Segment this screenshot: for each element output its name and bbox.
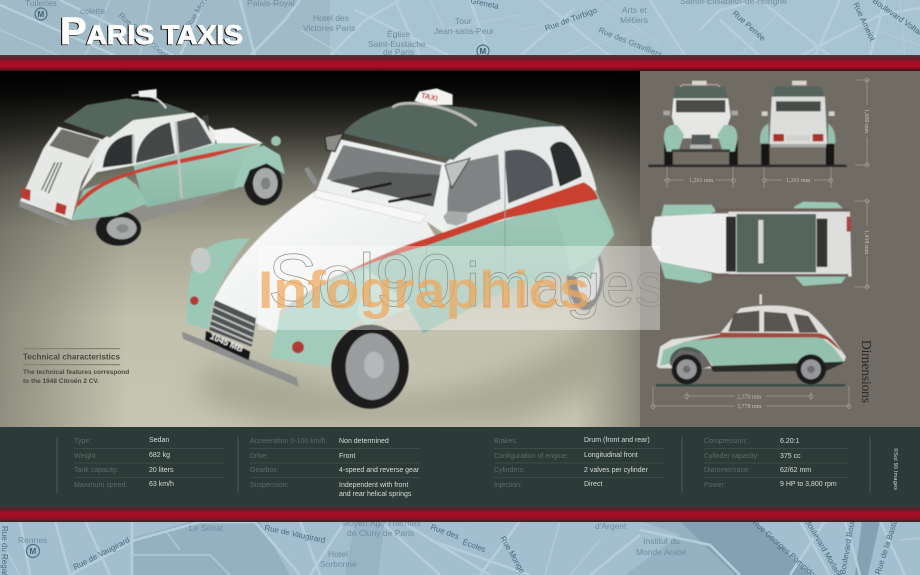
watermark bbox=[258, 239, 666, 330]
dimension labels: 2,370 mm bbox=[737, 394, 762, 400]
specs column 3: Direct bbox=[584, 481, 602, 488]
heading: dimensions: Dimensions bbox=[859, 340, 874, 403]
roof rail bbox=[393, 103, 477, 126]
wheel: rear big bbox=[567, 240, 603, 310]
title: PARIS TAXIS bbox=[60, 11, 243, 53]
wheel: front bbox=[244, 161, 282, 205]
watermark: Sol90 bbox=[268, 239, 457, 322]
dimension labels: 1,418 mm bbox=[863, 230, 869, 255]
map labels: top: Jean-sans-Peur bbox=[434, 26, 494, 36]
description: to the 1948 Citroën 2 CV. bbox=[23, 378, 99, 385]
dimension labels: 1,600 mm bbox=[863, 109, 869, 134]
dimension labels: 3,778 mm bbox=[737, 404, 762, 410]
number plate bbox=[205, 331, 250, 360]
map labels: bottom: Monde Arabe bbox=[636, 547, 687, 557]
specs column 3: Configuration of engine: bbox=[494, 453, 568, 460]
taxi roof sign bbox=[414, 88, 453, 105]
specs column 4: 6.20:1 bbox=[780, 438, 800, 445]
icon: metro stations top bbox=[35, 8, 489, 57]
icon: metro stations top: M bbox=[480, 47, 486, 56]
specs column 4: Diameter/race: bbox=[704, 467, 750, 474]
blueprint: side view bbox=[656, 294, 847, 386]
map labels: top: Église bbox=[387, 29, 410, 39]
map labels: top: Hotel des bbox=[313, 13, 349, 23]
map labels: top: Tour bbox=[455, 16, 472, 26]
fender: front right bbox=[270, 268, 411, 367]
roof bbox=[343, 103, 567, 160]
icon: metro stations top: M bbox=[38, 10, 44, 19]
text block: technical characteristics bbox=[23, 348, 129, 385]
dimension lines bbox=[651, 78, 870, 408]
map background: bottom bbox=[0, 506, 920, 575]
map labels: top: Rue Ameiot bbox=[851, 1, 877, 43]
grille bbox=[209, 300, 256, 347]
watermark: images bbox=[466, 251, 666, 320]
wheel: rear bbox=[96, 211, 141, 246]
specs column 2: Independent with front bbox=[339, 482, 408, 489]
map labels: bottom: de Cluny de Paris bbox=[347, 528, 414, 538]
fender: front left bbox=[187, 238, 250, 329]
specs column 4: Power: bbox=[704, 482, 726, 489]
red band: top bbox=[0, 55, 920, 71]
map labels: bottom: Écoles bbox=[461, 537, 487, 554]
map labels: bottom: Moyen Âge Thermes bbox=[342, 518, 421, 528]
specs column 1: Sedan bbox=[149, 437, 169, 444]
dimension labels bbox=[689, 109, 869, 410]
map labels: bottom: Rue Monge bbox=[498, 534, 527, 575]
specs column 2: Acceleration 0-100 km/h: bbox=[250, 438, 327, 445]
icon: metro station bottom: M bbox=[30, 547, 36, 556]
blueprint: top view bbox=[652, 202, 852, 286]
icon: metro station bottom bbox=[26, 544, 40, 558]
map labels: top: de Paris bbox=[383, 47, 414, 57]
map labels: bottom: Boulevard Bourdon bbox=[838, 506, 859, 575]
map labels: top bbox=[25, 0, 920, 61]
specs column 2: Suspension: bbox=[250, 482, 289, 489]
blueprint: front and rear views bbox=[648, 81, 847, 167]
map labels: bottom: Rue de la Bastille bbox=[873, 513, 901, 575]
car: main front three-quarter view taxi bbox=[182, 88, 614, 409]
specs column 4: Compression: bbox=[704, 438, 747, 445]
specs column 3: Drum (front and rear) bbox=[584, 437, 650, 444]
map labels: bottom: Rue de Vaugirard bbox=[72, 536, 131, 572]
title: PARIS TAXIS bbox=[59, 12, 242, 54]
map labels: top: Rue des Gravilliers bbox=[597, 26, 663, 59]
specs column 4: 62/62 mm bbox=[780, 467, 811, 474]
number plate: 1045 MB bbox=[209, 331, 245, 354]
map labels: top: Rue Perrée bbox=[731, 9, 767, 43]
headlight and lamps bbox=[190, 248, 304, 353]
body: mint lower side bbox=[337, 188, 614, 333]
dimension labels: 1,261 mm bbox=[786, 178, 811, 184]
panel: dimension drawings bbox=[648, 78, 874, 410]
wing mirror bbox=[443, 211, 468, 226]
map labels: top: Métiers bbox=[620, 15, 648, 25]
map labels: top: Rue de Turbigo bbox=[544, 6, 599, 33]
map labels: bottom: Rennes bbox=[18, 535, 47, 545]
map labels: top: Victores Paris bbox=[303, 23, 355, 33]
red stripe bbox=[340, 182, 598, 275]
copyright: ©Sol 90 Images bbox=[892, 448, 899, 490]
specs column 3: Longitudinal front bbox=[584, 452, 638, 459]
specs column 1: 682 kg bbox=[149, 452, 170, 459]
map labels: bottom: Sorbonne bbox=[320, 559, 357, 569]
specs column 3 bbox=[494, 437, 664, 489]
car: rear three-quarter view taxi bbox=[19, 89, 285, 246]
panel: main render background bbox=[0, 70, 640, 428]
map labels: bottom: Institut du bbox=[643, 536, 680, 546]
specs column 2: Non determined bbox=[339, 438, 389, 445]
map labels: top: colette bbox=[80, 6, 105, 16]
specs column 1: 63 km/h bbox=[149, 481, 174, 488]
watermark: Infographics bbox=[258, 261, 590, 320]
front view bbox=[663, 81, 738, 165]
rear view bbox=[760, 81, 835, 165]
specs column 3: Injection: bbox=[494, 482, 522, 489]
description: The technical features correspond bbox=[23, 369, 129, 376]
wheel: front big bbox=[331, 325, 409, 409]
specs column 1: Tank capacity: bbox=[74, 467, 118, 474]
red band: bottom bbox=[0, 506, 920, 522]
specs column 2: Gearbox: bbox=[250, 467, 279, 474]
body: white upper rear bbox=[447, 124, 597, 235]
map background: top bbox=[0, 0, 920, 62]
taxi roof sign: TAXI bbox=[420, 91, 439, 103]
specs column 1: Maximum speed: bbox=[74, 482, 127, 489]
specs column 2: 4-speed and reverse gear bbox=[339, 467, 420, 474]
map labels: bottom bbox=[0, 506, 901, 575]
map labels: bottom: d'Argent bbox=[595, 521, 627, 531]
body: windscreen frame bbox=[317, 138, 447, 236]
specs column 4: 9 HP to 3,800 rpm bbox=[780, 481, 837, 488]
specs column 3: Brakes: bbox=[494, 438, 518, 445]
car reflection on floor bbox=[200, 320, 600, 425]
specs column 2: Drive: bbox=[250, 453, 268, 460]
map labels: top: Saint-Eustache bbox=[368, 39, 426, 49]
heading: technical characteristics: Technical characteristics bbox=[23, 352, 120, 362]
panel: dimensions background bbox=[640, 70, 920, 428]
specs column 2: and rear helical springs bbox=[339, 491, 412, 498]
specs column 4 bbox=[704, 438, 848, 489]
specs column 2: Front bbox=[339, 453, 355, 460]
bumper bbox=[182, 332, 299, 387]
map labels: top: Arts et bbox=[622, 5, 647, 15]
map labels: bottom: Hotel bbox=[328, 549, 348, 559]
specs column 2 bbox=[250, 438, 420, 498]
map labels: bottom: Rue de Vaugirard bbox=[264, 523, 326, 545]
dimension labels: 1,261 mm bbox=[689, 178, 714, 184]
map labels: top: Rue Saint-Honoré bbox=[117, 11, 171, 61]
specs column 3: 2 valves per cylinder bbox=[584, 467, 648, 474]
body: bonnet bbox=[213, 190, 438, 333]
specs column 1: 20 liters bbox=[149, 467, 174, 474]
specs column 1: Weight: bbox=[74, 453, 98, 460]
map labels: bottom: Le Sénat bbox=[189, 523, 224, 533]
specs column 3: Cylinders: bbox=[494, 467, 525, 474]
panel: technical specifications band bbox=[0, 427, 920, 508]
map labels: bottom: Rue des bbox=[429, 522, 460, 541]
specs column 4: 375 cc bbox=[780, 453, 801, 460]
specs column 1: Type: bbox=[74, 438, 91, 445]
specs column 4: Cylinder capacity: bbox=[704, 453, 759, 460]
wheels bbox=[672, 354, 826, 384]
specs column 1 bbox=[74, 437, 224, 489]
